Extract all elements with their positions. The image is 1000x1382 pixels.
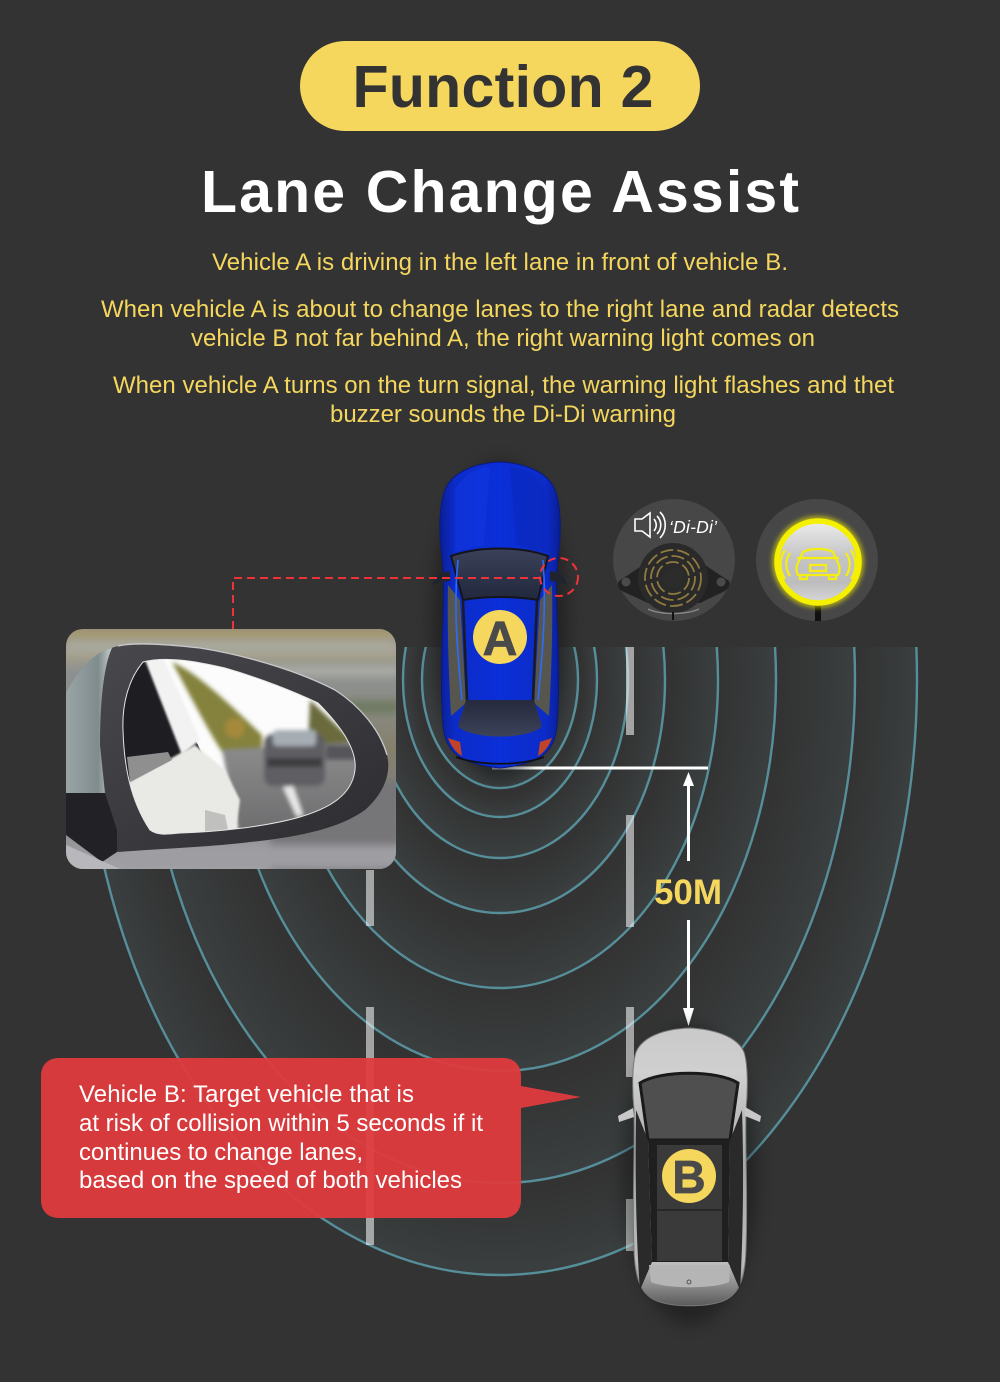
buzzer icon — [613, 499, 735, 621]
50M distance marker — [492, 766, 722, 1026]
badge A: A — [483, 613, 517, 666]
function badge — [300, 41, 700, 131]
mirror housing — [66, 644, 388, 852]
callout: vehicle B risk — [41, 1058, 581, 1218]
mirror glass reflection — [124, 660, 355, 834]
callout: vehicle B risk: based on the speed of both vehicles — [79, 1167, 462, 1194]
vehicle A: blue car top view — [432, 460, 568, 780]
sound icon — [635, 512, 665, 538]
description text: Vehicle A is driving in the left lane in front of vehicle B. — [212, 249, 788, 276]
badge B — [662, 1149, 716, 1203]
description text: When vehicle A turns on the turn signal, the warning light flashes and thet — [113, 372, 894, 399]
warning light icon — [756, 499, 878, 621]
mirror photo panel — [66, 629, 400, 875]
callout: vehicle B risk: continues to change lanes, — [79, 1139, 363, 1166]
50M distance marker: 50M — [654, 873, 722, 912]
badge B: B — [672, 1151, 706, 1203]
radar wave rings — [103, 647, 918, 1276]
description text: buzzer sounds the Di-Di warning — [330, 401, 676, 428]
function badge: Function 2 — [352, 54, 654, 120]
callout: vehicle B risk: Vehicle B: Target vehicle that is — [79, 1081, 414, 1108]
red dashed link between mirror and vehicle A — [233, 558, 578, 629]
lane markings — [366, 647, 634, 1251]
description text — [101, 249, 899, 428]
buzzer icon: ‘Di-Di’ — [669, 517, 718, 537]
description text: vehicle B not far behind A, the right warning light comes on — [191, 325, 815, 352]
description text: When vehicle A is about to change lanes to the right lane and radar detects — [101, 296, 899, 323]
vehicle B: silver car top view — [618, 1025, 761, 1325]
badge A — [473, 610, 527, 666]
callout: vehicle B risk: at risk of collision within 5 seconds if it — [79, 1110, 483, 1137]
heading: Lane Change Assist — [201, 159, 799, 225]
